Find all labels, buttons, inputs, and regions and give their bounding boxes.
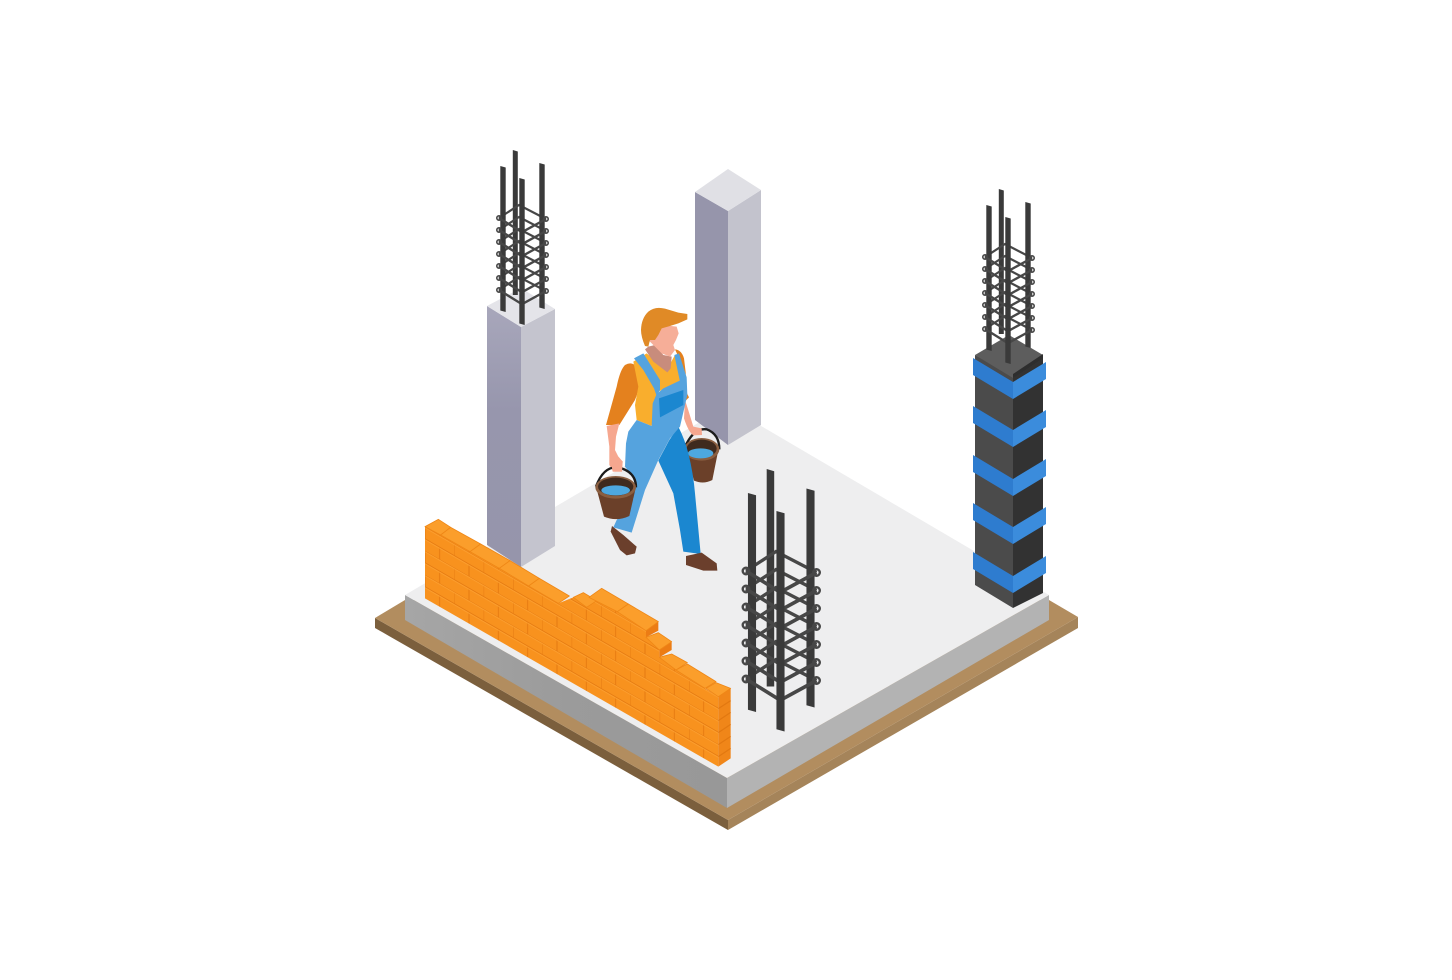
left rebar cage (497, 150, 548, 325)
back bucket (684, 429, 719, 483)
right shoulder (675, 349, 686, 375)
left concrete pillar (487, 288, 555, 567)
back concrete pillar (695, 169, 761, 445)
neck (645, 345, 672, 372)
back leg (658, 427, 701, 554)
right rebar cage (983, 189, 1034, 364)
back shoe (686, 553, 717, 571)
left sleeve (606, 363, 640, 425)
blue bands (973, 358, 1046, 593)
wall front face (425, 527, 718, 767)
head (648, 325, 679, 357)
centre rebar cage (743, 469, 820, 732)
right arm (684, 400, 702, 435)
left hand (611, 457, 623, 472)
brick wall (425, 519, 731, 767)
front shoe (611, 526, 637, 555)
concrete slab (405, 406, 1049, 808)
shirt (633, 353, 687, 426)
overalls (613, 377, 687, 533)
left arm (607, 423, 623, 472)
dark column (975, 355, 1013, 608)
wall end face (718, 688, 731, 767)
hair (641, 308, 687, 347)
front bucket (595, 467, 636, 519)
bib pocket (659, 390, 683, 417)
worker carrying buckets (595, 308, 719, 571)
formwork pillar with blue bands (973, 335, 1046, 608)
wall top bricks (425, 519, 731, 697)
ground base (375, 600, 1078, 830)
raised brick end faces (646, 622, 672, 657)
